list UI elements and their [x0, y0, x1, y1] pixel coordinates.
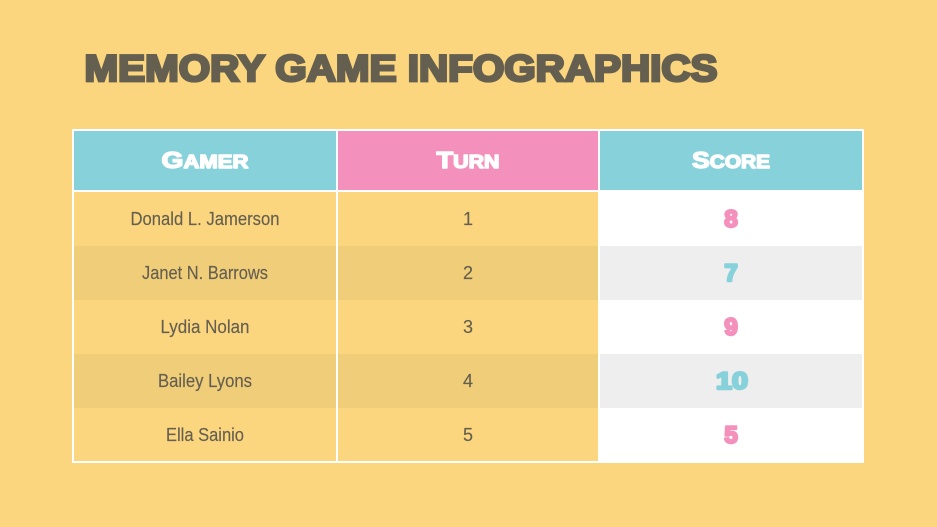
row 4: 10 — [716, 368, 748, 395]
header cell: gamer: GAMER — [162, 147, 248, 173]
header cell: score: SCORE — [692, 147, 770, 173]
row 5: 5 — [724, 422, 738, 449]
row 3: 3 — [463, 317, 473, 337]
row 3: 9 — [724, 314, 738, 341]
row 2: Janet N. Barrows — [142, 263, 268, 283]
header cell: score — [600, 131, 862, 190]
row 2: 7 — [724, 260, 738, 287]
row 4: Bailey Lyons — [158, 371, 252, 391]
row 1: 1 — [463, 209, 473, 229]
band backgrounds — [74, 192, 862, 461]
title: MEMORY GAME INFOGRAPHICS — [84, 47, 718, 89]
row 4 — [158, 368, 748, 395]
row 4: 4 — [463, 371, 473, 391]
row 2: 2 — [463, 263, 473, 283]
table header row — [74, 131, 862, 190]
header cell: turn — [338, 131, 598, 190]
row 5: Ella Sainio — [166, 425, 244, 445]
row 3: Lydia Nolan — [160, 317, 250, 337]
table grid lines — [73, 130, 863, 462]
table — [73, 130, 863, 462]
row 1: 8 — [724, 206, 738, 233]
row 5: 5 — [463, 425, 473, 445]
row 2 — [142, 260, 738, 287]
header cell: gamer — [74, 131, 336, 190]
row 1 — [130, 206, 738, 233]
row 3 — [160, 314, 738, 341]
row 1: Donald L. Jamerson — [130, 209, 280, 229]
header cell: turn: TURN — [436, 147, 500, 173]
row 5 — [166, 422, 738, 449]
